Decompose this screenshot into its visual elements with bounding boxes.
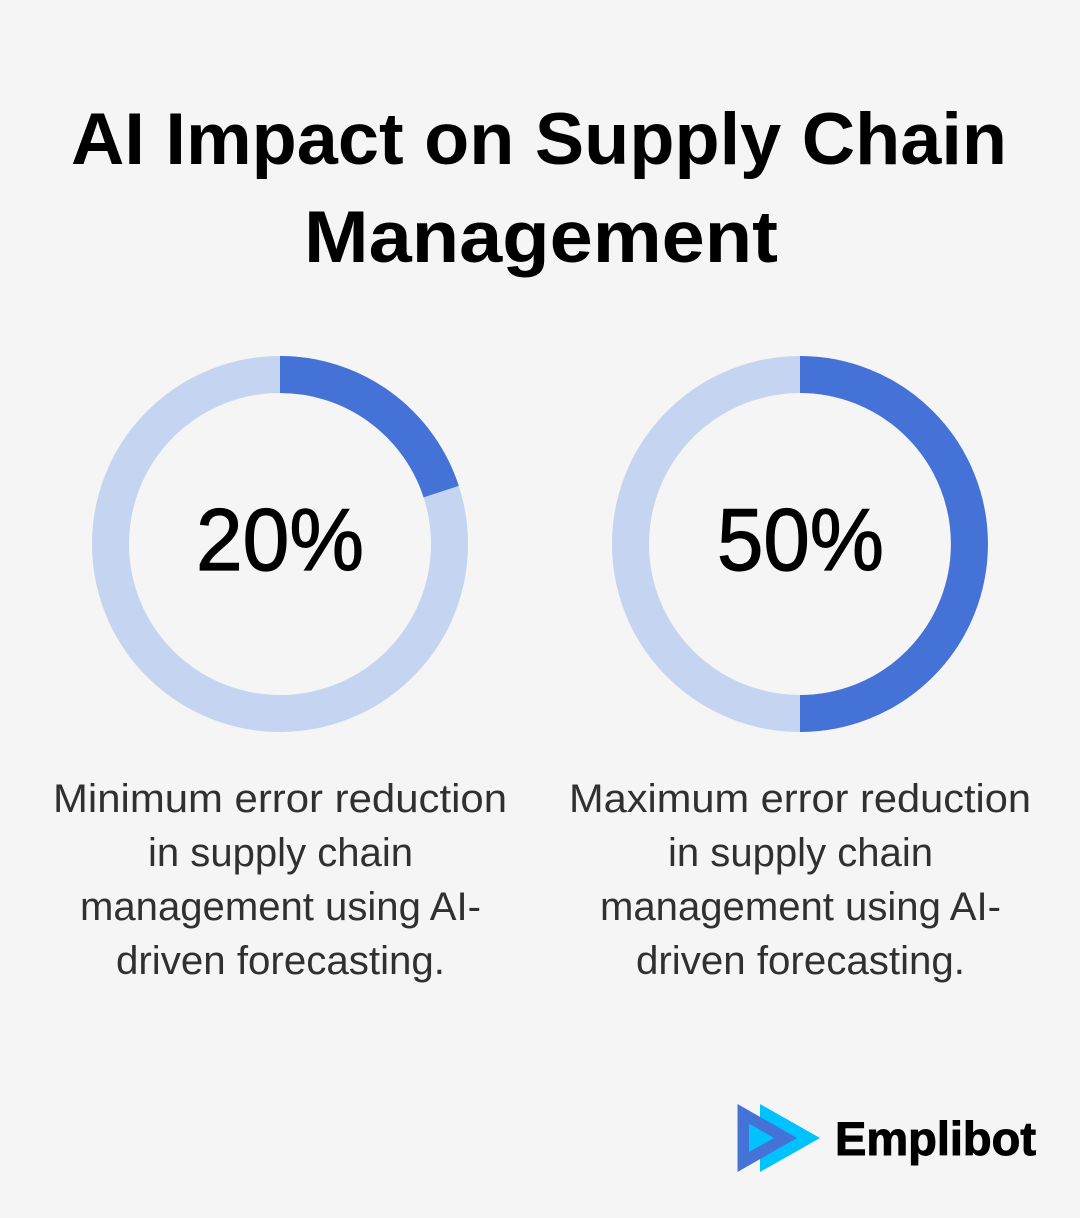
donut chart: 50% [630, 374, 970, 714]
description: maximum error reduction: driven forecasting. [636, 939, 965, 983]
description: minimum error reduction: Minimum error reduction [53, 777, 507, 821]
description: maximum error reduction [569, 777, 1031, 983]
panel: 50% maximum error reduction [569, 374, 1031, 983]
wordmark: Emplibot [835, 1112, 1036, 1165]
description: minimum error reduction: management using AI- [80, 885, 481, 929]
description: minimum error reduction: in supply chain [148, 831, 413, 875]
value: 50%: 50% [717, 490, 884, 589]
description: minimum error reduction [53, 777, 507, 983]
description: maximum error reduction: management using AI- [600, 885, 1001, 929]
description: maximum error reduction: Maximum error reduction [569, 777, 1031, 821]
description: maximum error reduction: in supply chain [668, 831, 933, 875]
title [71, 99, 1007, 278]
panel: 20% minimum error reduction [53, 374, 507, 983]
title: AI Impact on Supply Chain [71, 99, 1007, 180]
donut chart: 20% [110, 374, 450, 714]
value: 20%: 20% [196, 490, 364, 589]
logo: Emplibot [738, 1104, 1036, 1172]
description: minimum error reduction: driven forecasting. [116, 939, 445, 983]
icon: play triangles [738, 1104, 820, 1172]
title: Management [304, 197, 778, 278]
